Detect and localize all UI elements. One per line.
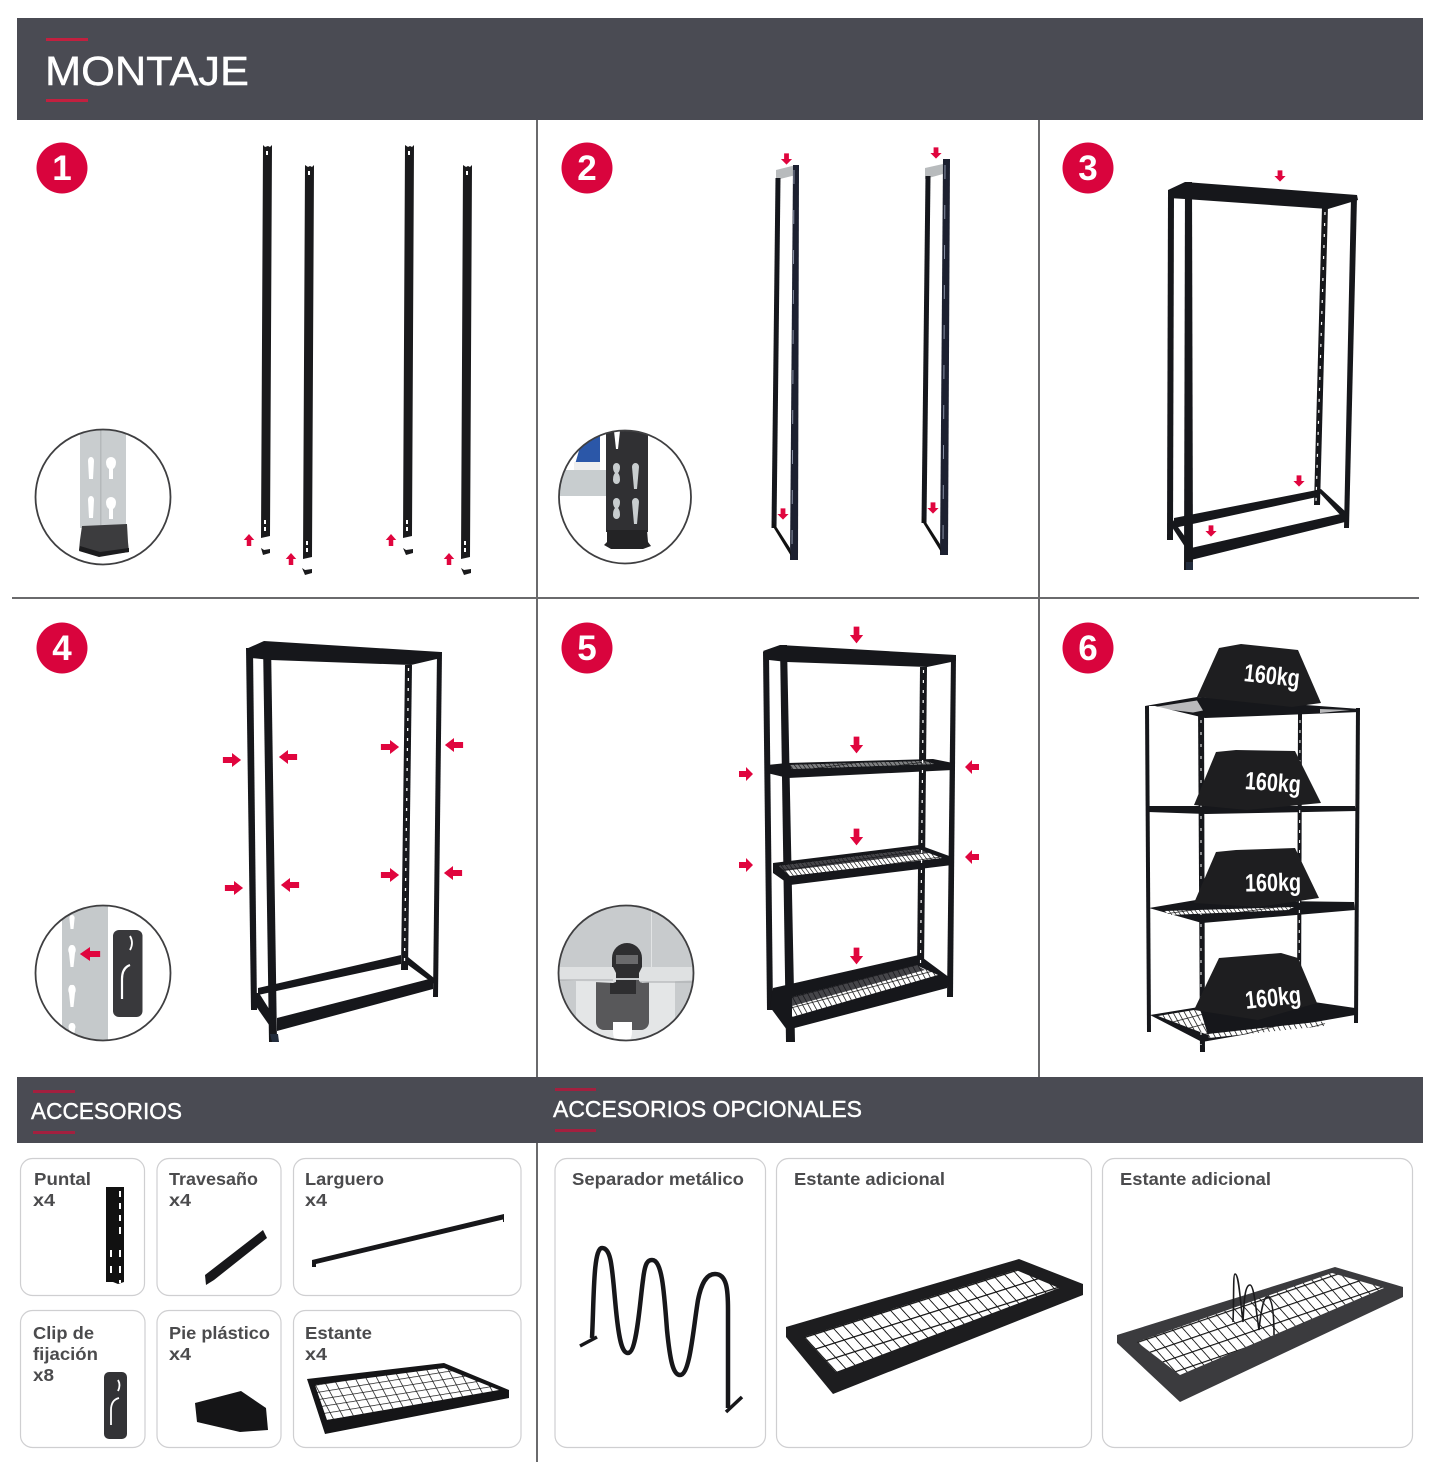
weight: top 160kg [1197,644,1321,707]
card: clip de fijación [33,1323,127,1439]
card: estante: x4 [305,1344,327,1364]
step number 1: 1 [52,149,72,188]
arrows inward [223,738,463,895]
card: clip de fijación: x8 [33,1365,54,1385]
icon: long beam [312,1214,504,1267]
icon: plastic foot [195,1391,268,1432]
card: clip de fijación: Clip de [33,1323,94,1343]
card: travesaño [169,1169,267,1285]
icon: cross beam [205,1230,267,1285]
panel: step 4 [36,622,463,1043]
card: puntal: x4 [33,1190,55,1210]
arrows down [777,147,942,520]
card: estante: Estante [305,1323,372,1343]
weight: bottom 160kg [1194,953,1317,1020]
card: estante adicional 1: Estante adicional [794,1169,945,1189]
card: estante adicional 2: Estante adicional [1120,1169,1271,1189]
loaded shelving [1145,697,1360,1052]
inset: black post detail [558,428,691,564]
card: pie plástico [169,1323,270,1432]
icon: post [106,1187,124,1284]
frame with beams [1167,182,1358,570]
card: puntal: Puntal [34,1169,91,1189]
panel: step 5 [555,622,979,1045]
icon: wire shelf [786,1259,1083,1394]
step number 3 [1062,142,1114,194]
card: separador metálico [572,1169,744,1412]
assembled shelving [763,645,956,1042]
panel: step 1 [36,142,472,575]
panel: step 3 [1062,142,1358,570]
icon: clip [104,1372,127,1439]
card: separador metálico: Separador metálico [572,1169,744,1189]
step number 5: 5 [577,629,597,668]
step number 3: 3 [1078,149,1098,188]
weight: third 160kg [1194,848,1319,907]
card: estante adicional 2 [1117,1169,1403,1402]
card: pie plástico: Pie plástico [169,1323,270,1343]
inset: beam hook detail [555,903,697,1045]
icon: wire separator [580,1248,742,1412]
step number 6: 6 [1078,629,1098,668]
card: larguero: Larguero [305,1169,384,1189]
card: larguero: x4 [305,1190,327,1210]
icon: wire shelf [307,1363,509,1434]
frame with beams [246,641,442,1042]
step number 4: 4 [52,629,72,668]
step number 1 [36,142,88,194]
step number 2: 2 [577,149,597,188]
inset: fixing clip detail [36,903,170,1043]
arrows [739,627,979,964]
weight: third 160kg: 160kg [1245,869,1301,897]
card: puntal [33,1169,124,1284]
step number 4 [36,622,88,674]
band: accesorios opcionales: ACCESORIOS OPCIONALES [553,1096,862,1122]
weight: second 160kg [1194,750,1321,810]
band: accesorios [17,1077,1423,1143]
weight: bottom 160kg: 160kg [1244,981,1302,1015]
card: pie plástico: x4 [169,1344,191,1364]
panel: step 6 [1062,622,1360,1052]
right side frame [922,159,950,555]
card: travesaño: Travesaño [169,1169,258,1189]
header: montaje [17,18,1423,120]
card: travesaño: x4 [169,1190,191,1210]
header: montaje: MONTAJE [45,48,249,94]
weight: top 160kg: 160kg [1243,659,1301,693]
step number 2 [562,142,612,194]
arrows down [1205,170,1305,537]
weight: second 160kg: 160kg [1244,767,1302,799]
band: accesorios opcionales [553,1088,862,1132]
band: accesorios: ACCESORIOS [31,1098,182,1124]
left side frame [772,165,799,560]
card: estante adicional 1 [786,1169,1083,1394]
panel: step 2 [558,142,950,564]
card: estante [305,1323,509,1434]
icon: wire shelf with separator [1117,1267,1403,1402]
step number 6 [1062,622,1114,674]
inset: post foot detail [36,428,170,564]
card: larguero [305,1169,504,1267]
posts with plastic feet [261,145,472,575]
step number 5 [562,622,612,674]
arrows up [244,534,454,565]
card: clip de fijación: fijación [33,1344,98,1364]
